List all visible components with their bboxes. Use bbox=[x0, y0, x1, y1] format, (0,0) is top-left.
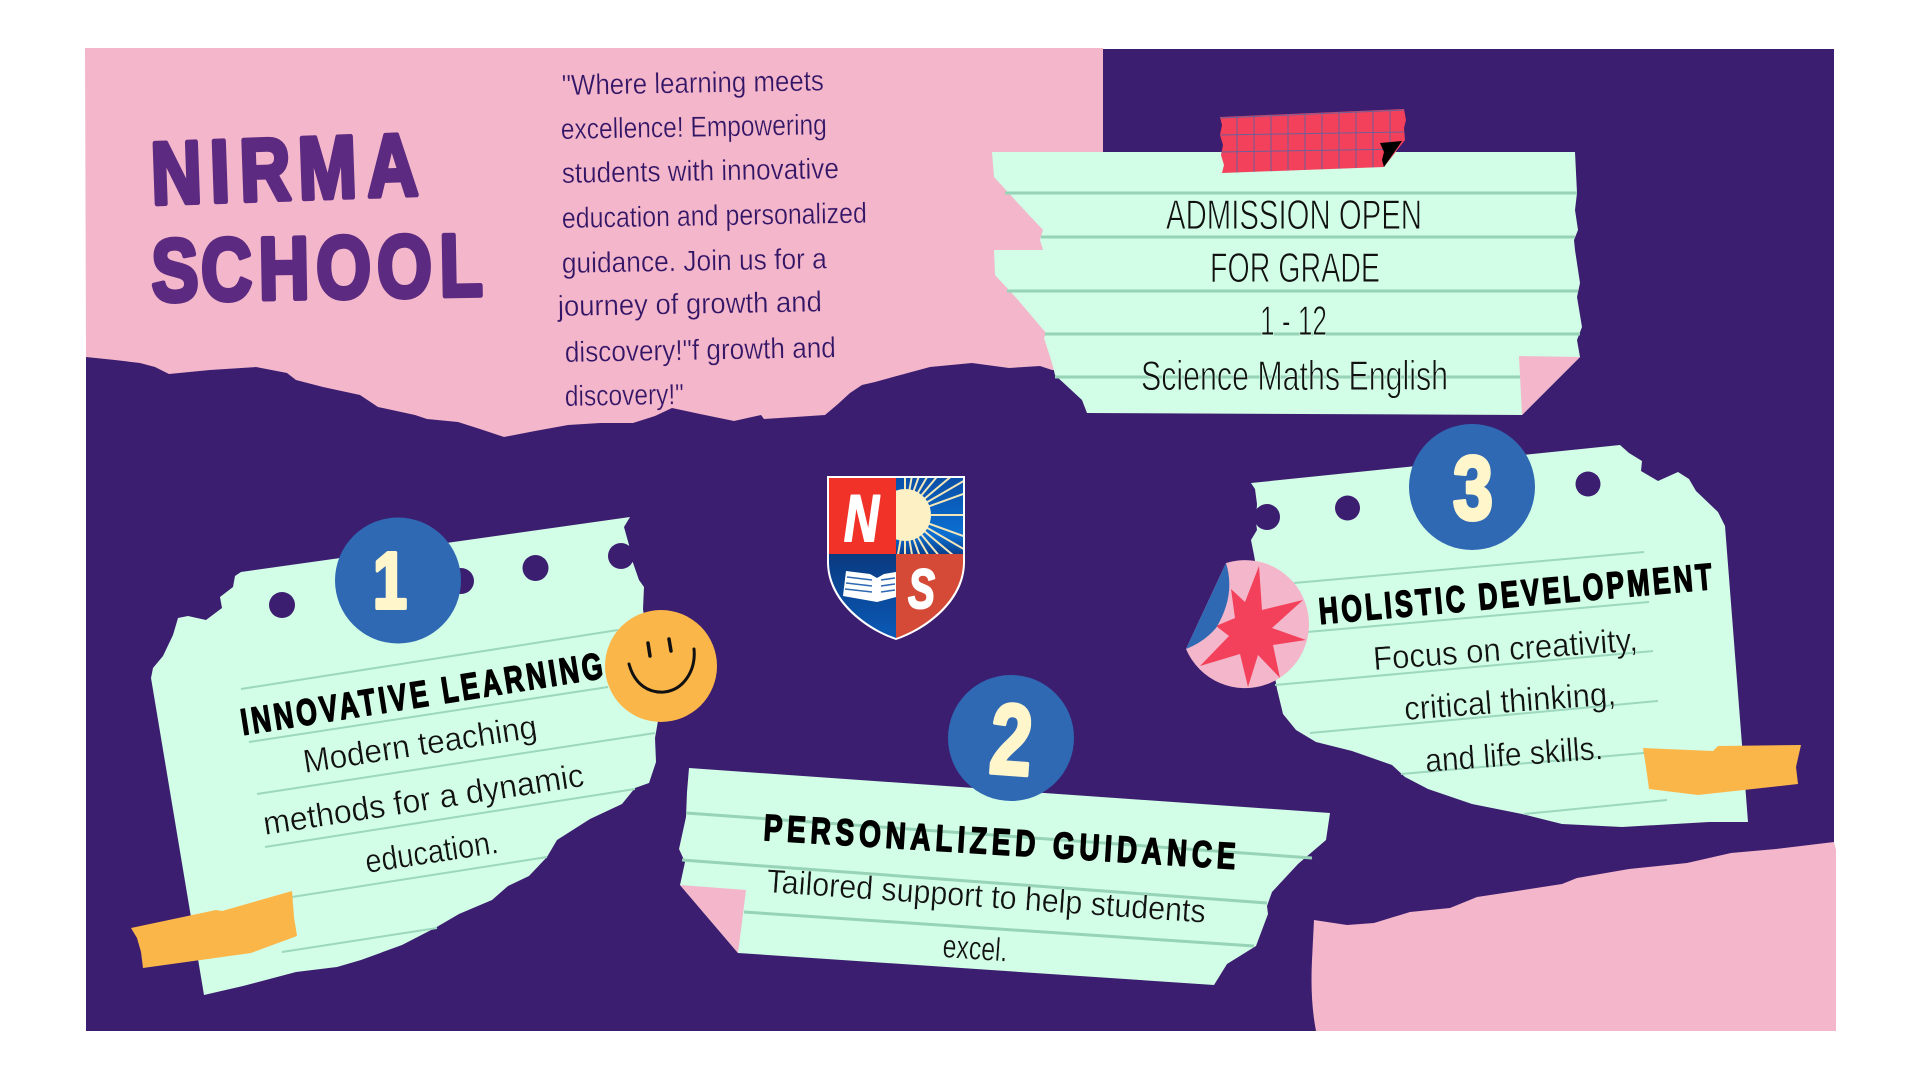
heading: school name bbox=[149, 115, 483, 320]
icon: smiley sticker bbox=[605, 610, 717, 722]
panel: torn pink header bbox=[85, 48, 1103, 437]
admission text: Science Maths English bbox=[1141, 352, 1448, 399]
corner fold bbox=[680, 885, 746, 953]
heading: school name: NIRMA bbox=[149, 115, 419, 223]
card 1 body bbox=[260, 708, 586, 880]
number badge 3: 3 bbox=[1453, 439, 1493, 539]
card 2 heading: PERSONALIZED GUIDANCE bbox=[763, 806, 1237, 877]
number badge 1: 1 bbox=[373, 536, 407, 625]
card 3 body: critical thinking, bbox=[1403, 675, 1617, 727]
card 3 body: Focus on creativity, bbox=[1372, 621, 1639, 677]
icon: star sticker bbox=[1186, 560, 1309, 688]
card 2 body: Tailored support to help students bbox=[766, 862, 1207, 930]
card 3 body: and life skills. bbox=[1424, 729, 1604, 779]
red grid tape bbox=[1220, 109, 1406, 173]
icon: open book bbox=[843, 571, 896, 602]
admission text: ADMISSION OPEN bbox=[1166, 191, 1422, 238]
admission text bbox=[1141, 191, 1448, 399]
card 2 body: excel. bbox=[942, 927, 1009, 969]
quadrant: red N bbox=[829, 478, 896, 554]
quadrant: red S bbox=[896, 554, 965, 644]
card 1 body: methods for a dynamic bbox=[260, 756, 586, 842]
heading: school name: SCHOOL bbox=[151, 216, 483, 320]
corner fold bbox=[1519, 356, 1580, 415]
text block: school quote bbox=[557, 65, 867, 413]
text block: school quote: "Where learning meets bbox=[562, 65, 824, 102]
number badge 3 bbox=[1409, 424, 1535, 550]
monogram letters: S bbox=[908, 557, 935, 620]
binder holes bbox=[1254, 472, 1600, 530]
text block: school quote: discovery!" bbox=[565, 379, 684, 413]
card 3 body bbox=[1372, 621, 1639, 779]
binder holes bbox=[269, 543, 634, 618]
quadrant: sun bbox=[896, 478, 963, 554]
number badge 1 bbox=[335, 518, 461, 644]
logo: school shield bbox=[827, 476, 965, 640]
monogram letters bbox=[844, 481, 935, 620]
panel: card 1 innovative learning bbox=[151, 517, 658, 995]
text block: school quote: students with innovative bbox=[562, 153, 839, 190]
panel: card 2 personalized guidance bbox=[679, 675, 1330, 985]
card 1 body: Modern teaching bbox=[300, 708, 539, 780]
tape fold bbox=[1380, 141, 1402, 167]
panel: admission note bbox=[992, 152, 1582, 415]
text block: school quote: education and personalized bbox=[562, 198, 867, 235]
text block: school quote: excellence! Empowering bbox=[561, 109, 827, 146]
card 2 body bbox=[766, 862, 1207, 969]
number badge 2 bbox=[948, 675, 1074, 801]
card 1 heading: INNOVATIVE LEARNING bbox=[238, 645, 606, 743]
text block: school quote: guidance. Join us for a bbox=[562, 243, 828, 280]
card 3 heading: HOLISTIC DEVELOPMENT bbox=[1317, 556, 1714, 632]
card 1 body: education. bbox=[362, 823, 501, 880]
admission text: FOR GRADE bbox=[1210, 244, 1380, 291]
orange tape card 3 bbox=[1643, 745, 1801, 795]
quadrant: book bbox=[829, 554, 896, 644]
orange tape card 1 bbox=[131, 891, 297, 968]
monogram letters: N bbox=[844, 481, 880, 555]
torn pink footer bbox=[1312, 842, 1836, 1031]
admission text: 1 - 12 bbox=[1260, 297, 1327, 344]
text block: school quote: discovery!"f growth and bbox=[565, 332, 836, 369]
number badge 2: 2 bbox=[987, 683, 1036, 797]
panel: card 3 holistic development bbox=[1251, 424, 1748, 827]
text block: school quote: journey of growth and bbox=[557, 286, 822, 323]
